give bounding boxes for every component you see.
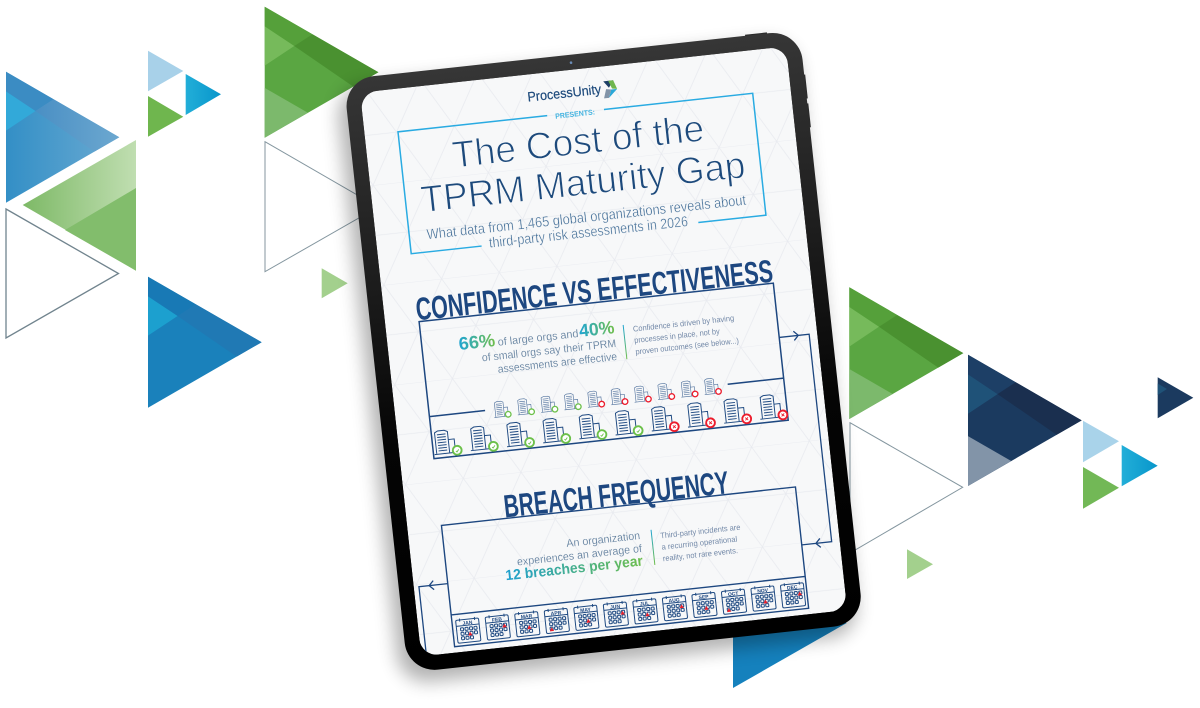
title: The Cost of the — [450, 107, 706, 176]
small cyan triangle right — [1122, 445, 1158, 486]
calendar row: MAY — [580, 607, 592, 614]
calendar row: JAN — [462, 620, 473, 627]
logo — [528, 80, 618, 102]
heading: breach frequency: BREACH FREQUENCY — [502, 464, 730, 524]
blue triangle upper left — [6, 72, 119, 203]
small green triangle — [148, 96, 183, 137]
stat: 66 and 40 percent — [459, 321, 617, 373]
calendar row: NOV — [757, 588, 769, 595]
divider — [651, 530, 655, 565]
stat: breaches text: An organization — [566, 530, 641, 550]
title box — [398, 93, 766, 254]
background triangles left — [6, 7, 378, 408]
calendar row — [455, 581, 806, 643]
calendar row: MAR — [521, 613, 533, 621]
logo mark — [602, 80, 618, 98]
stat: breaches text — [506, 532, 642, 580]
screen — [360, 46, 848, 664]
subtitle: What data from 1,465 global organizations reveals about — [426, 193, 747, 243]
green triangle top — [265, 7, 378, 138]
light green triangle lower right — [907, 549, 933, 579]
connector arrow left — [418, 580, 448, 652]
title: TPRM Maturity Gap — [419, 143, 747, 220]
small green triangle right — [1083, 467, 1119, 509]
panel frame — [419, 283, 788, 459]
panel: confidence vs effectiveness — [416, 260, 832, 548]
calendar row: DEC — [787, 585, 798, 592]
small cyan triangle — [186, 74, 221, 115]
blue triangle under tablet — [733, 558, 847, 688]
large organisations row — [432, 393, 788, 457]
note: confidence — [632, 313, 740, 356]
green triangle right — [849, 287, 963, 419]
presents label: PRESENTS: — [555, 107, 595, 121]
stat: 66 and 40 percent: assessments are effective — [497, 351, 618, 376]
small light green triangle — [322, 268, 348, 298]
calendar row: FEB — [492, 617, 503, 624]
stat: 66 and 40 percent: 66% — [458, 330, 496, 354]
note: incidents: reality, not rare events. — [662, 546, 738, 563]
calendar row: SEP — [698, 594, 710, 601]
stat: breaches text: experiences an average of — [516, 543, 643, 568]
stat: breaches text: 12 breaches per year — [505, 553, 644, 584]
heading: confidence vs effectiveness: CONFIDENCE VS EFFECTIVENESS — [414, 253, 775, 327]
outline triangle right — [850, 423, 963, 553]
camera — [570, 61, 572, 64]
stat: 66 and 40 percent: of small orgs say their TPRM — [481, 338, 617, 364]
calendar row: APR — [550, 610, 562, 617]
tablet — [343, 29, 865, 673]
panel frame — [441, 487, 809, 647]
subtitle: third-party risk assessments in 2026 — [488, 214, 689, 252]
small organisations row — [493, 377, 722, 419]
small navy triangle far right — [1158, 377, 1193, 418]
connector arrow right — [779, 330, 832, 549]
outline triangle top — [265, 142, 378, 272]
calendar row: AUG — [668, 597, 680, 605]
note: incidents: Third-party incidents are — [660, 523, 741, 540]
note: confidence: processes in place, not by — [634, 327, 720, 345]
calendar row: JUN — [610, 604, 621, 611]
green left-pointing triangle — [23, 140, 136, 271]
note: incidents — [660, 526, 740, 562]
panel: breach frequency — [418, 471, 810, 652]
logo wordmark: ProcessUnity — [527, 82, 602, 105]
divider — [623, 325, 627, 359]
outline triangle left — [6, 209, 118, 338]
tablet buttons — [745, 29, 811, 133]
small light blue triangle right — [1083, 421, 1119, 462]
background triangles right — [733, 287, 1193, 688]
title — [420, 118, 744, 211]
tablet shadow — [335, 38, 860, 685]
stat: 66 and 40 percent: of large orgs and — [497, 328, 579, 349]
note: incidents: a recurring operational — [661, 535, 738, 552]
blue triangle lower — [148, 277, 262, 408]
calendar row: OCT — [728, 591, 739, 598]
note: confidence: proven outcomes (see below...) — [635, 336, 740, 356]
small light blue triangle — [148, 51, 183, 91]
navy triangle — [968, 355, 1082, 486]
calendar row: JUL — [640, 601, 650, 608]
tablet body — [344, 30, 864, 673]
stat: 66 and 40 percent: 40% — [578, 317, 615, 341]
note: confidence: Confidence is driven by having — [632, 314, 735, 334]
